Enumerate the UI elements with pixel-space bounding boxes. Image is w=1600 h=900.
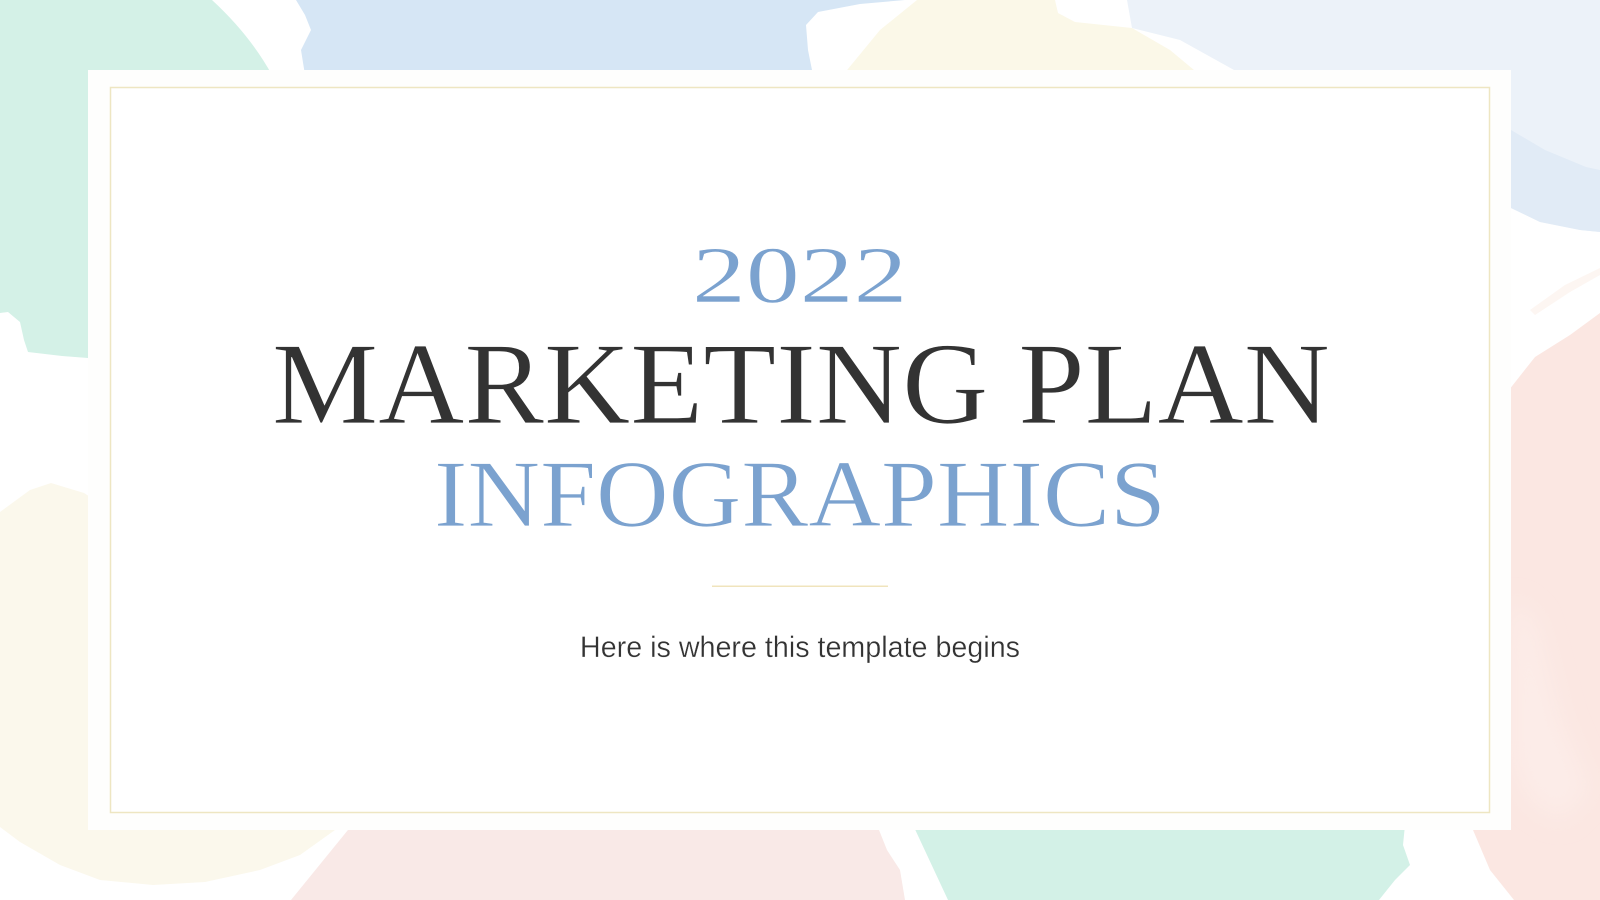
title: MARKETING PLAN — [272, 320, 1330, 449]
brush: pink bottom — [291, 825, 905, 900]
panel: white card — [88, 70, 1511, 830]
divider — [712, 586, 888, 587]
text: tagline: Here is where this template begins — [580, 631, 1020, 664]
brush: deeper blue right — [1511, 130, 1600, 232]
heading: year: 2022 — [692, 230, 907, 320]
subtitle heading: INFOGRAPHICS — [434, 441, 1166, 547]
brush: yellow top — [843, 0, 1200, 75]
brush: yellow bottom left — [0, 483, 342, 885]
brush: blue top — [296, 0, 905, 75]
brush: green bottom — [913, 825, 1410, 900]
panel: inner frame — [110, 88, 1490, 812]
brush: green top left — [0, 0, 272, 358]
brush: pale streak — [1530, 268, 1600, 315]
brush: salmon right — [1473, 313, 1600, 900]
brush: pale blue top right — [1127, 0, 1600, 232]
brush: pale salmon highlight — [1511, 600, 1590, 820]
